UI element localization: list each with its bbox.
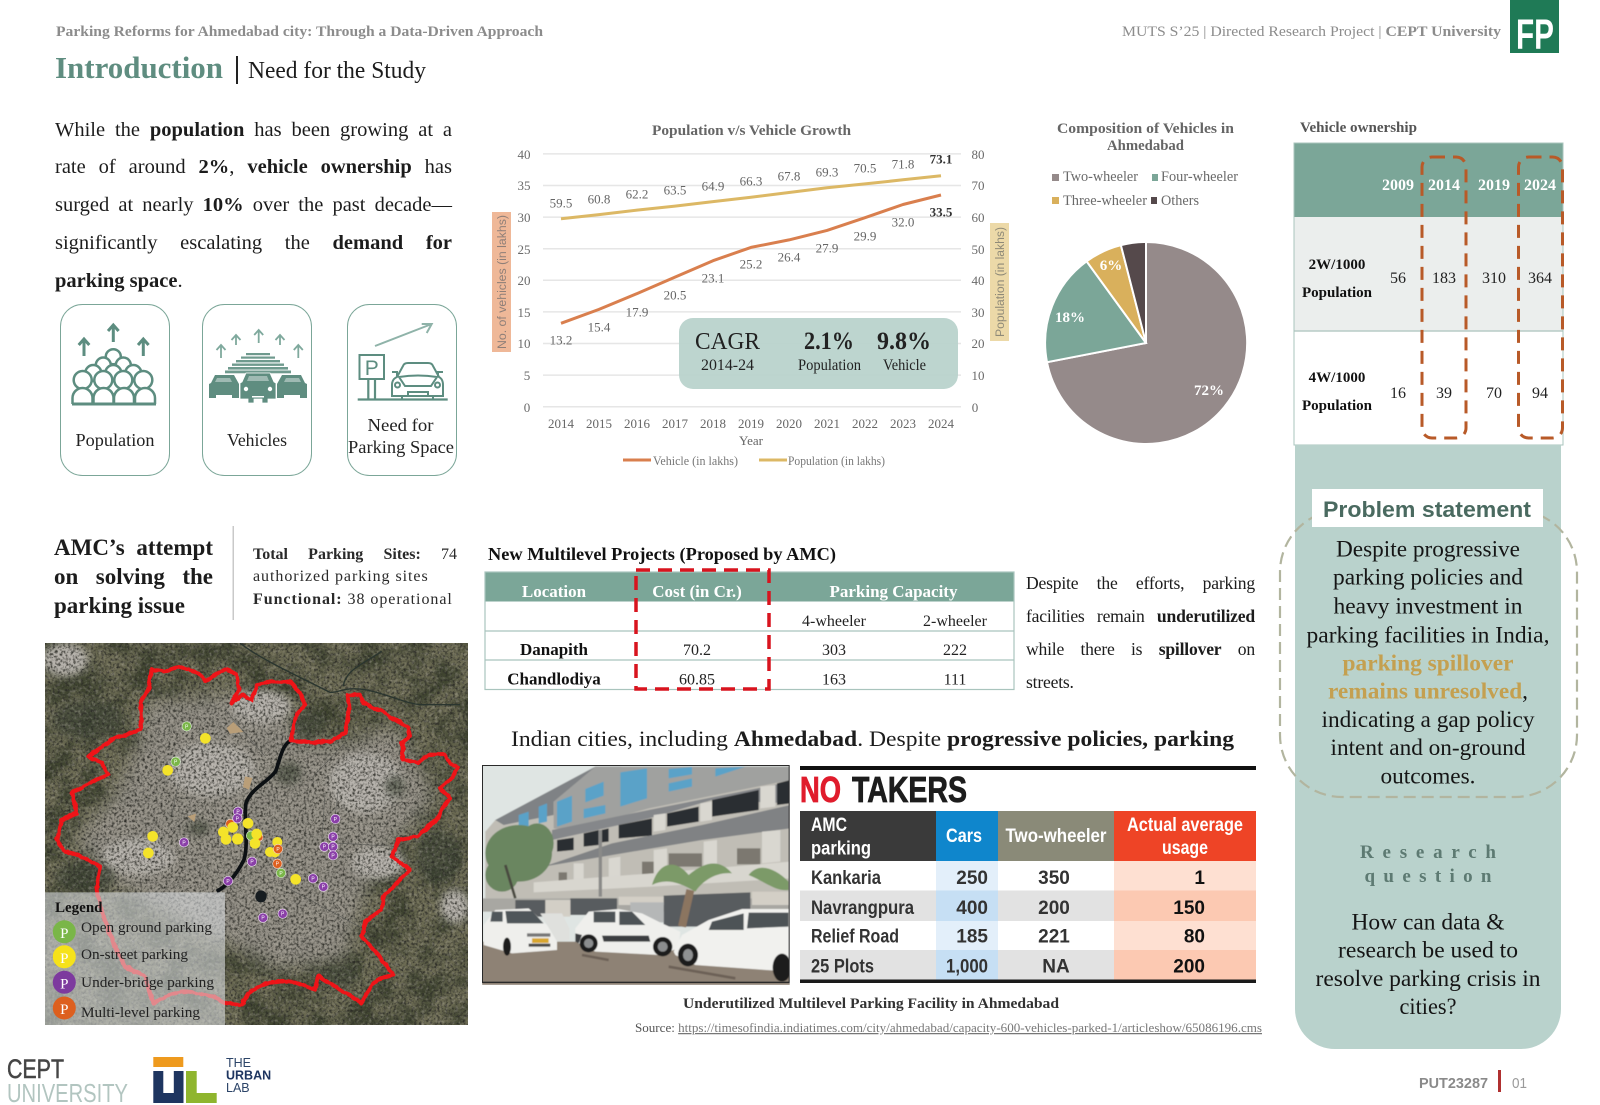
icon card: Need for Parking Space: Parking Space [348,437,454,457]
year labels [548,416,954,448]
problem statement text: indicating a gap policy [1322,707,1535,733]
pie labels: 72% [1194,383,1224,399]
table: vehicle ownership: 2024 [1524,177,1556,194]
source link: Source: https://timesofindia.indiatimes.com/city/ahmedabad/capacity-600-vehicles-parked-1/articleshow/65086196.cms [635,1021,1262,1035]
table: new multilevel projects: 163 [822,672,846,688]
news table: No Takers: Actual average [1127,815,1243,836]
left axis: 35 [518,178,530,193]
table: vehicle ownership: 16 [1390,385,1406,402]
news table: No Takers: 350 [1038,868,1070,889]
left axis title: No. of vehicles (in lakhs) [497,215,509,349]
heading: AMC's attempt: AMC’s attempt [54,535,213,560]
right axis: 60 [972,210,984,225]
vehicle data labels: 13.2 [550,332,572,348]
icon: parking sign, car and rising arrow [358,324,448,400]
research question text: resolve parking crisis in [1316,966,1541,992]
research question heading: question [1364,866,1492,887]
table: new multilevel projects: 222 [943,642,967,659]
research question heading [1360,842,1496,887]
left axis: 20 [518,273,530,288]
text block: underutilized facilities: while there is spillover on [1026,638,1255,658]
pie title: Composition of Vehicles in [1057,121,1234,137]
icon card: Vehicles: Vehicles [227,430,287,450]
icon card: Population [60,304,170,476]
text block: total parking sites: Total Parking Sites: 74 [253,546,457,562]
table: new multilevel projects: 2-wheeler [923,613,988,630]
research question text: cities? [1400,994,1456,1020]
right axis: 40 [972,273,984,288]
markers: open ground parking [171,722,286,878]
table: vehicle ownership: 364 [1528,270,1552,287]
vehicle data labels: 20.5 [664,288,686,302]
logo: The Urban Lab [153,1056,271,1103]
text block: underutilized facilities: facilities remain underutilized [1026,606,1255,626]
city boundary [57,667,458,1005]
table: new multilevel projects: Parking Capacity [830,582,958,601]
research question text [1316,910,1541,1020]
year labels: 2022 [852,416,878,431]
population data labels [550,152,952,210]
text block: introduction paragraph: While the population has been growing at a [55,118,452,140]
logo: The Urban Lab: THE [226,1056,251,1070]
population data labels: 64.9 [702,178,724,194]
panel: problem statement and research question [1280,445,1577,1049]
icon card: Vehicles [202,304,312,476]
left axis: 30 [518,210,530,225]
news table: No Takers: Navrangpura [811,898,914,919]
heading: AMC's attempt: on solving the [54,564,213,589]
left axis: 10 [518,336,530,351]
markers: under-bridge parking: P [250,860,254,866]
news table: No Takers: 25 Plots [811,956,874,978]
left axis title [492,212,511,352]
table: new multilevel projects: Cost (in Cr.) [652,582,742,601]
news table: No Takers: Kankaria [811,868,881,889]
heading: Introduction [55,50,426,85]
year labels: 2014 [548,416,574,431]
news table: No Takers: AMC [811,815,847,836]
vehicle data labels: 26.4 [778,250,801,264]
CAGR callout: 2014-24 [701,357,754,374]
text block: introduction paragraph: significantly escalating the demand for [55,232,452,254]
vehicle data labels: 27.9 [816,240,838,256]
year labels: 2020 [776,416,802,431]
table: new multilevel projects: 4-wheeler [802,613,867,630]
table: vehicle ownership: 94 [1532,385,1548,402]
highlight: 2014 and 2024 columns [1422,157,1562,438]
research question heading: Research [1360,842,1496,863]
right axis: 30 [972,305,984,320]
table: vehicle ownership: 2019 [1478,177,1510,194]
markers: under-bridge parking: P [322,885,326,891]
table: new multilevel projects: 60.85 [679,672,715,688]
CAGR callout: 9.8% [877,328,931,355]
population data labels: 67.8 [778,168,800,184]
table: vehicle ownership: 4W/1000 [1309,370,1365,386]
table: new multilevel projects: Danapith [520,640,589,659]
news table: No Takers: 185 [956,926,988,948]
CAGR callout: CAGR [695,329,760,355]
markers: under-bridge parking: P [261,916,265,922]
markers: under-bridge parking: P [331,845,335,851]
problem statement text: heavy investment in [1334,594,1523,620]
footer: sheet number [1419,1070,1527,1092]
table: vehicle ownership: 39 [1436,385,1452,402]
population data labels: 73.1 [930,152,952,166]
pie chart: composition of vehicles [1045,121,1247,444]
heading: AMC's attempt: parking issue [54,593,185,618]
right axis: 80 [972,147,984,162]
problem statement heading: Problem statement [1323,497,1532,522]
news table: No Takers: 150 [1173,898,1205,919]
chart legend [623,453,885,468]
tan patches and roads [188,722,252,822]
problem statement text: remains unresolved, [1328,678,1528,704]
news headline: NO [800,769,841,810]
icon: traffic with arrows [209,330,307,403]
right axis: 70 [972,178,984,193]
table: vehicle ownership: Vehicle ownership [1300,120,1417,136]
chart title: Population v/s Vehicle Growth [652,123,851,139]
map legend: P [60,976,68,992]
vehicle data labels: 15.4 [588,320,611,334]
header: project title: Parking Reforms for Ahmedabad city: Through a Data-Driven Approach [56,24,544,40]
population data labels: 62.2 [626,186,648,202]
vehicle data labels: 32.0 [892,214,914,230]
table: vehicle ownership: 70 [1486,385,1502,402]
table: new multilevel projects: New Multilevel Projects (Proposed by AMC) [488,544,836,564]
photo: multilevel parking building [482,765,792,985]
table: vehicle ownership [1294,120,1563,445]
pie legend: Others [1161,193,1199,209]
icon: parking sign, car and rising arrow: P [365,357,379,380]
right axis title [990,223,1009,341]
news table: No Takers: Relief Road [811,926,899,948]
logo: FP badge: FP [1516,11,1554,59]
news table: No Takers: 200 [1038,898,1070,919]
chart legend: Vehicle (in lakhs) [653,453,738,468]
map legend: Under-bridge parking [81,975,215,991]
news table: No Takers: 400 [956,898,988,919]
markers: open ground parking: P [185,724,189,730]
table: vehicle ownership: 183 [1432,270,1456,287]
table: vehicle ownership: Population [1302,398,1373,414]
photo caption: Underutilized Multilevel Parking Facility in Ahmedabad [683,996,1059,1012]
year labels: 2015 [586,416,612,431]
markers: multi-level parking, foreground: P [276,847,280,853]
population data labels: 60.8 [588,192,610,206]
logo: FP badge [1510,0,1559,59]
markers: open ground parking: P [174,760,178,766]
CAGR callout [679,318,958,389]
news table: No Takers: Cars [946,826,982,847]
right axis title: Population (in lakhs) [995,227,1007,337]
header: course and university: MUTS S’25 | Directed Research Project | CEPT University [1122,24,1502,40]
text block: total parking sites: Functional: 38 operational [253,590,453,608]
heading: Introduction: Introduction [55,50,223,85]
pie labels [1055,258,1224,399]
CAGR callout: 2.1% [804,328,854,355]
vehicle data labels: 25.2 [740,256,762,272]
problem statement text [1306,536,1550,790]
markers: under-bridge parking: P [331,853,335,859]
icon card: Need for Parking Space [348,304,456,476]
research question text: research be used to [1338,938,1518,964]
news table: No Takers: 80 [1184,926,1205,948]
news table: No Takers: NA [1042,956,1070,978]
pie legend [1052,169,1238,209]
running sentence above photo: Indian cities, including Ahmedabad . Despite progressive policies, parking [511,726,1235,751]
highlight: cost column [636,570,769,689]
markers: multi-level parking, foreground [273,844,283,868]
right axis: 50 [972,242,984,257]
text block: underutilized facilities [1026,572,1255,692]
problem statement text: Despite progressive [1336,536,1520,562]
markers: under-bridge parking: P [311,876,315,882]
line chart: population vs vehicle growth [492,123,1009,468]
population data labels: 71.8 [892,156,914,172]
CAGR callout: Vehicle [883,357,926,374]
left axis: 15 [518,305,530,320]
text block: introduction paragraph: rate of around 2%, vehicle ownership has [55,156,452,178]
problem statement text: outcomes. [1380,764,1476,790]
canal [240,643,460,705]
population data labels: 59.5 [550,196,572,210]
population data labels: 69.3 [816,164,838,180]
left axis: 40 [518,147,530,162]
river [217,740,292,891]
logo: CEPT University: CEPT [7,1054,64,1084]
news table: No Takers: 200 [1173,956,1205,978]
population data labels: 63.5 [664,182,686,198]
year labels: 2019 [738,416,764,431]
population line [561,176,941,219]
logo: The Urban Lab: LAB [226,1081,250,1095]
vehicle data labels: 29.9 [854,228,876,244]
problem statement heading [1312,489,1543,527]
text block: introduction paragraph: parking space. [55,270,183,292]
news table: No Takers: parking [811,838,871,860]
left axis [518,147,530,415]
news table: No Takers: 1 [1194,868,1205,889]
vehicle data labels: 23.1 [702,270,724,286]
vehicle data labels [550,204,953,348]
text block: total parking sites [253,546,457,608]
pie labels: 18% [1055,310,1085,326]
year labels: 2023 [890,416,916,431]
pie legend: Four-wheeler [1161,169,1238,185]
news table: No Takers: 250 [956,868,988,889]
dashed frame [1280,510,1577,797]
markers: under-bridge parking: P [281,912,285,918]
map legend [53,900,215,1021]
markers: multi-level parking [226,819,263,841]
heading: AMC's attempt [54,535,213,618]
research question text: How can data & [1352,910,1504,936]
news table: No Takers: 221 [1038,926,1070,948]
pie title: Ahmedabad [1107,138,1184,154]
year labels: Year [739,433,764,448]
map legend: P [60,926,68,942]
map legend: Open ground parking [81,920,213,936]
footer: sheet number: 01 [1512,1075,1527,1092]
text block: introduction paragraph [55,118,452,292]
vehicle data labels: 17.9 [626,304,648,320]
urban grey area [75,693,435,970]
table: new multilevel projects: Chandlodiya [507,670,601,688]
CAGR callout: Population [798,357,861,374]
markers: under-bridge parking: P [236,810,240,816]
markers: under-bridge parking: P [323,845,327,851]
table: vehicle ownership: 2009 [1382,177,1414,194]
map legend: Legend [55,900,103,916]
table: new multilevel projects [485,544,1014,690]
left axis: 5 [524,368,530,383]
problem statement text: parking policies and [1333,564,1523,590]
vehicle line [561,195,941,323]
table: new multilevel projects: 70.2 [683,642,711,659]
problem statement text: parking spillover [1342,650,1514,676]
year labels: 2024 [928,416,954,431]
table: vehicle ownership: 56 [1390,270,1406,287]
table: vehicle ownership: 2W/1000 [1309,257,1365,273]
year labels: 2021 [814,416,840,431]
logo: The Urban Lab: URBAN [226,1068,271,1082]
pie legend: Three-wheeler [1063,193,1147,209]
news table: No Takers: usage [1162,838,1208,859]
markers: under-bridge parking [179,807,340,922]
markers: open ground parking: P [279,871,283,877]
pie slices [1045,242,1247,444]
map legend: P [60,1002,68,1018]
map legend panel [45,892,225,1025]
right axis: 0 [972,400,978,415]
news table: No Takers: Two-wheeler [1006,826,1107,847]
table: vehicle ownership: 2014 [1428,177,1460,194]
footer: sheet number: PUT23287 [1419,1075,1488,1092]
markers: under-bridge parking: P [334,817,338,823]
map legend: On-street parking [81,947,188,963]
table: new multilevel projects: 111 [944,672,966,688]
right axis: 20 [972,336,984,351]
divider beside AMC heading [232,526,234,620]
pie labels: 6% [1100,258,1122,274]
year labels: 2016 [624,416,650,431]
problem statement text: intent and on-ground [1330,735,1526,761]
icon card: Population: Population [76,430,154,450]
left axis: 0 [524,400,530,415]
right axis: 10 [972,368,984,383]
markers: under-bridge parking: P [182,840,186,846]
table: vehicle ownership: 310 [1482,270,1506,287]
markers: under-bridge parking: P [331,835,335,841]
year labels: 2017 [662,416,688,431]
news headline [800,769,967,810]
left axis: 25 [518,242,530,257]
problem statement text: parking facilities in India, [1306,622,1550,648]
text block: total parking sites: authorized parking sites [253,568,429,585]
pie title [1057,121,1234,154]
chart legend: Population (in lakhs) [788,453,885,468]
text block: introduction paragraph: surged at nearly 10% over the past decade— [55,194,452,216]
table: new multilevel projects: 303 [822,642,846,659]
icon: crowd with arrows [72,325,156,404]
population data labels: 66.3 [740,174,762,188]
map legend: Multi-level parking [81,1005,201,1021]
heading: Introduction: Need for the Study [248,58,426,84]
text block: underutilized facilities: streets. [1026,672,1074,692]
markers: on-street parking [143,733,301,885]
map: parking locations in Ahmedabad [42,643,470,1025]
population data labels: 70.5 [854,160,876,176]
markers: under-bridge parking: P [226,879,230,885]
pie legend: Two-wheeler [1063,169,1138,185]
year labels: 2018 [700,416,726,431]
table: vehicle ownership: Population [1302,285,1373,301]
markers: under-bridge parking: P [236,816,240,822]
news headline: TAKERS [852,769,967,810]
news table: No Takers: 1,000 [946,956,988,978]
icon card: Need for Parking Space: Need for [368,415,434,435]
map legend: P [60,951,68,967]
vehicle data labels: 33.5 [930,204,953,220]
table: new multilevel projects: Location [522,582,587,601]
right axis [972,147,984,415]
markers: multi-level parking, foreground: P [276,862,280,868]
logo: CEPT University [7,1054,128,1105]
news table: No Takers [800,766,1256,983]
text block: underutilized facilities: Despite the efforts, parking [1026,572,1255,592]
